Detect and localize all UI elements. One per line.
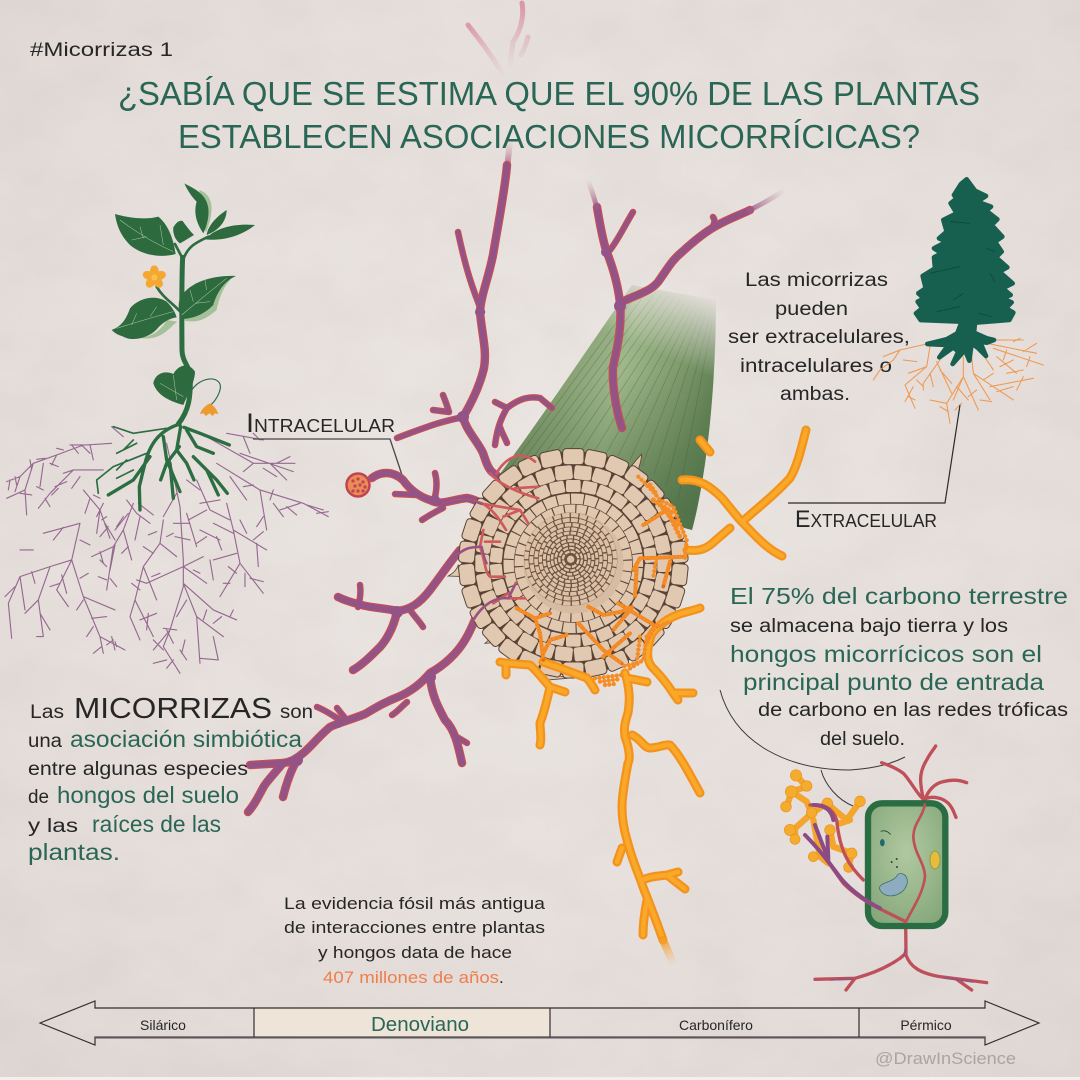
text: carbono terrestre: El 75% del carbono terrestre <box>730 583 1068 609</box>
vascular centre <box>524 513 617 606</box>
credit: @DrawInScience <box>875 1049 1016 1068</box>
purple hyphae inside root <box>440 456 538 670</box>
text: evidencia fósil: y hongos data de hace <box>318 943 512 962</box>
text: carbono terrestre <box>730 583 1068 750</box>
icon: hanging orange flower <box>200 403 218 416</box>
icon: plant with purple mycorrhizal roots <box>5 183 328 673</box>
text: definición de micorrizas: una <box>28 731 62 752</box>
title: ESTABLECEN ASOCIACIONES MICORRÍCICAS? <box>178 118 920 155</box>
green stem and roots <box>97 237 229 510</box>
double arrow outline <box>40 1001 1039 1045</box>
period labels: Denoviano <box>371 1014 469 1036</box>
text: definición de micorrizas: son <box>280 702 313 723</box>
text: carbono terrestre: del suelo. <box>820 729 905 750</box>
text: carbono terrestre: principal punto de entrada <box>743 669 1044 695</box>
purple hyphae network <box>248 165 785 812</box>
purple fine roots <box>5 427 328 673</box>
highlighted period: Denoviano <box>254 1008 550 1037</box>
leader line: intracelular <box>253 439 403 478</box>
tree foliage <box>916 179 1013 364</box>
hashtag heading: #Micorrizas 1 <box>30 40 173 61</box>
hypha through cell <box>906 803 925 922</box>
text: tipos de micorrizas: Las micorrizas <box>745 270 888 291</box>
text: definición de micorrizas: y las <box>28 816 78 837</box>
callout lines to plant cell <box>720 690 905 806</box>
text: carbono terrestre: de carbono en las redes tróficas <box>758 700 1068 721</box>
text: definición de micorrizas: raíces de las <box>92 811 221 837</box>
period labels <box>140 1014 952 1036</box>
text: definición de micorrizas: Las <box>30 702 64 723</box>
label: extracelular: EXTRACELULAR <box>795 506 937 533</box>
icon: plant cell with hyphae <box>781 746 987 990</box>
period labels: Carbonífero <box>679 1017 753 1033</box>
text: definición de micorrizas: hongos del suelo <box>57 782 239 808</box>
icon: red spore vesicle <box>346 474 370 496</box>
text: carbono terrestre: hongos micorrícicos son el <box>730 641 1042 667</box>
text: definición de micorrizas <box>28 693 313 865</box>
text: definición de micorrizas: de <box>28 787 49 808</box>
cell body <box>868 803 945 926</box>
root hairs and loose cells <box>448 454 642 680</box>
orange fine roots <box>873 338 1043 423</box>
text: definición de micorrizas: plantas. <box>28 839 120 865</box>
tree shading <box>930 222 995 317</box>
text: definición de micorrizas: asociación simbiótica <box>70 726 302 752</box>
green leaves <box>112 183 255 416</box>
period labels: Silárico <box>140 1017 186 1033</box>
purple hypha to arbuscule <box>805 805 906 922</box>
text: carbono terrestre: se almacena bajo tierra y los <box>730 616 1008 637</box>
orange arbuscule <box>787 776 860 868</box>
orange arbuscule dots <box>517 477 687 685</box>
text: evidencia fósil: . <box>499 968 504 987</box>
orange hyphae extracellular <box>500 430 806 965</box>
text: evidencia fósil <box>284 894 546 987</box>
leader line: extracelular <box>788 405 960 503</box>
text: tipos de micorrizas: ser extracelulares, <box>728 327 910 348</box>
text: tipos de micorrizas: ambas. <box>780 384 850 405</box>
text: evidencia fósil: de interacciones entre plantas <box>284 918 545 937</box>
root cross-section <box>440 449 688 680</box>
icon: yellow flower <box>142 265 167 290</box>
text: evidencia fósil: 407 millones de años <box>323 968 499 987</box>
timeline <box>40 1001 1039 1045</box>
hyphae around cell <box>815 746 987 990</box>
title: ¿SABÍA QUE SE ESTIMA QUE EL 90% DE LAS PLANTAS <box>118 75 980 112</box>
title <box>118 75 980 155</box>
top faded hypha behind title <box>468 3 528 170</box>
period labels: Pérmico <box>900 1017 952 1033</box>
text: definición de micorrizas: entre algunas especies <box>28 759 248 780</box>
root cylinder <box>497 285 716 530</box>
organelles <box>880 839 885 846</box>
text: tipos de micorrizas <box>728 270 910 405</box>
cell body <box>458 449 688 678</box>
icon: conifer tree with orange roots <box>873 179 1043 423</box>
text: tipos de micorrizas: intracelulares o <box>740 356 892 377</box>
label: intracelular: INTRACELULAR <box>246 408 395 438</box>
text: evidencia fósil: La evidencia fósil más antigua <box>284 894 546 913</box>
text: definición de micorrizas: MICORRIZAS <box>74 693 272 725</box>
text: tipos de micorrizas: pueden <box>775 299 848 320</box>
